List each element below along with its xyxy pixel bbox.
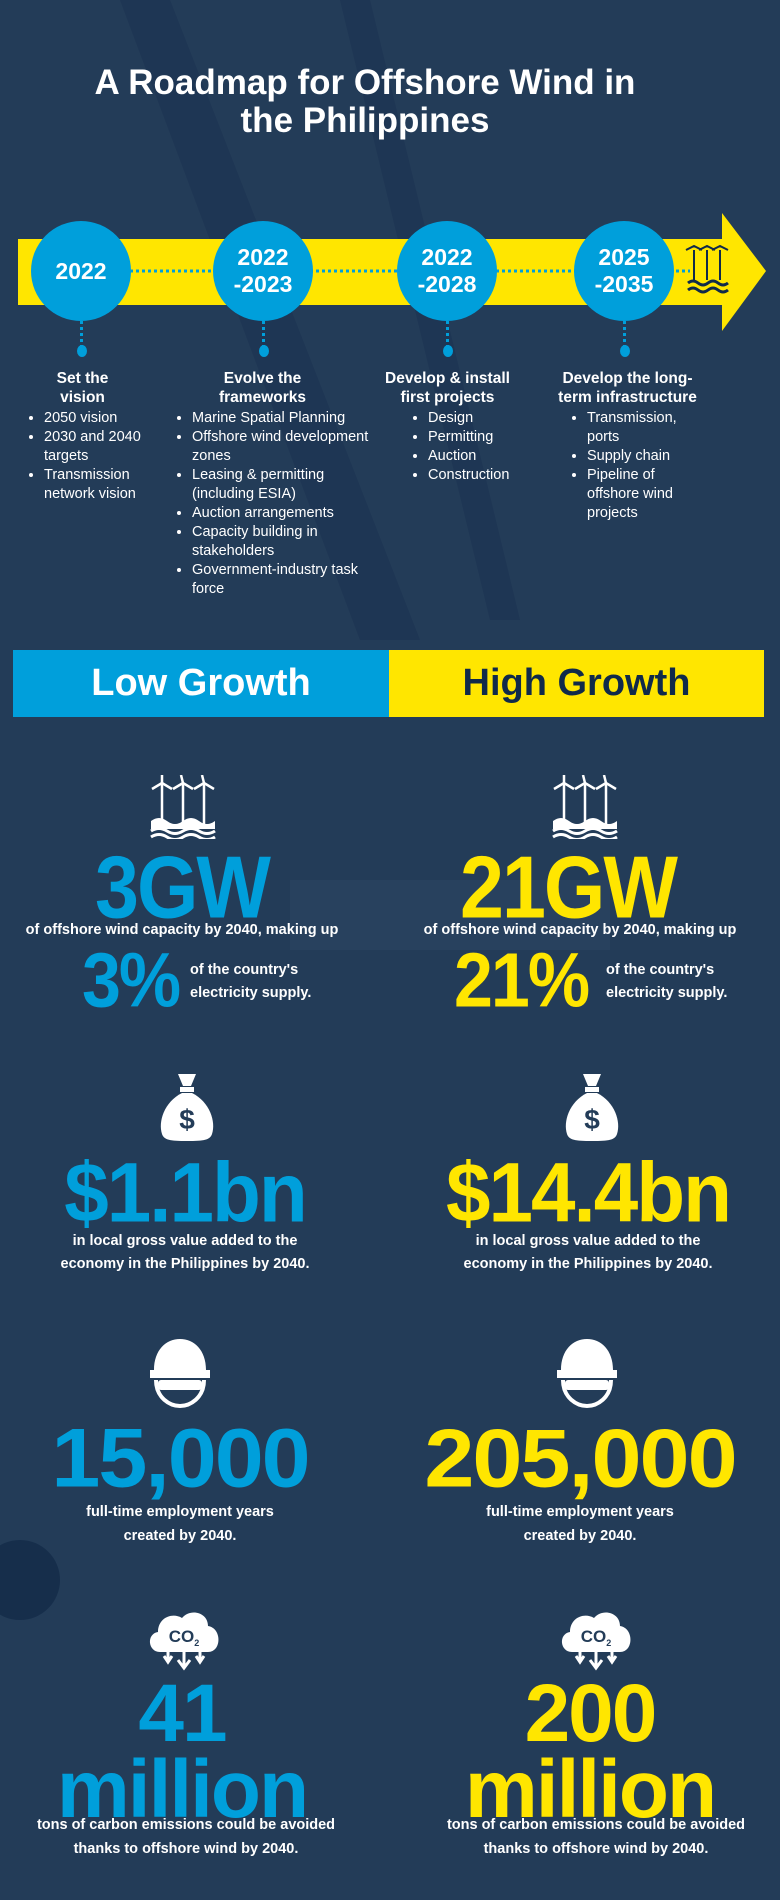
stage 1 text: Set the xyxy=(57,370,108,387)
text: capacity low: of offshore wind capacity by 2040, making up xyxy=(26,922,338,938)
stage 4 text: term infrastructure xyxy=(558,389,697,406)
header: low growth: Low Growth xyxy=(91,662,311,704)
milestone 2022-2023 xyxy=(213,221,313,321)
stat: $1.1bn: $1.1bn xyxy=(64,1146,306,1239)
stage 3 text: Design xyxy=(428,410,473,426)
text: jobs high: created by 2040. xyxy=(524,1528,636,1544)
milestone 2022 xyxy=(31,221,131,321)
text: carbon high xyxy=(447,1817,745,1857)
stat: 21GW: 21GW xyxy=(460,837,676,936)
icon: turbines right xyxy=(552,775,618,839)
milestone 2025-2035: 2025 xyxy=(598,244,650,270)
icon: CO2 cloud right: 2 xyxy=(606,1638,611,1648)
text: carbon high: tons of carbon emissions could be avoided xyxy=(447,1817,745,1833)
stat: 200 million: 200 xyxy=(525,1668,655,1759)
text: GVA low: in local gross value added to the xyxy=(73,1233,297,1249)
title: the Philippines xyxy=(241,101,489,140)
stage 2 text: Marine Spatial Planning xyxy=(192,410,345,426)
stage 2 text: Leasing & permitting (including ESIA) xyxy=(192,467,324,502)
stage 3 text: first projects xyxy=(401,389,494,406)
stage 3 text: Permitting xyxy=(428,429,493,445)
stat: 41 million: 41 xyxy=(138,1668,226,1759)
stage 3 text: Construction xyxy=(428,467,509,483)
stage 2 text: Offshore wind development zones xyxy=(192,429,368,464)
stage 3 text: Auction xyxy=(428,448,476,464)
stage 4 text: Supply chain xyxy=(587,448,670,464)
stat: 3% xyxy=(82,937,311,1023)
icon: CO2 cloud right xyxy=(562,1612,630,1670)
stage 2 text: Auction arrangements xyxy=(192,505,334,521)
text: jobs low: created by 2040. xyxy=(124,1528,236,1544)
text: jobs high: full-time employment years xyxy=(486,1504,674,1520)
stat: 3%: 3% xyxy=(82,937,179,1023)
stage 1 text: 2030 and 2040 targets xyxy=(44,429,141,464)
stage 1 text: 2050 vision xyxy=(44,410,117,426)
header: high growth xyxy=(389,650,764,717)
milestone 2022-2023: 2022 xyxy=(237,244,289,270)
stage 3 text: Develop & install xyxy=(385,370,510,387)
icon: money bag left xyxy=(160,1074,214,1141)
icon: CO2 cloud left: CO xyxy=(169,1627,194,1646)
milestone 2022-2023: -2023 xyxy=(234,271,292,297)
text: carbon low: thanks to offshore wind by 2040. xyxy=(74,1841,298,1857)
stat: 41 million: million xyxy=(57,1744,307,1835)
stage 2 text: Government-industry task force xyxy=(192,562,358,597)
stat: 200 million: million xyxy=(465,1744,715,1835)
icon: CO2 cloud right: CO xyxy=(581,1627,606,1646)
header: high growth: High Growth xyxy=(463,662,690,704)
icon: money bag left: $ xyxy=(179,1104,195,1135)
stage 4 text: Develop the long- xyxy=(562,370,693,387)
stage 2 text xyxy=(177,370,368,597)
stat: 15,000: 15,000 xyxy=(51,1410,309,1505)
stat: 3GW: 3GW xyxy=(95,837,269,936)
stage 2 text: Evolve the xyxy=(224,370,301,387)
milestone 2022-2028 xyxy=(397,221,497,321)
text: jobs low xyxy=(86,1504,274,1544)
icon: money bag right: $ xyxy=(584,1104,600,1135)
stat: 3%: of the country's electricity supply. xyxy=(190,962,311,1001)
stage 1 text: vision xyxy=(60,389,105,406)
header: low growth xyxy=(13,650,389,717)
icon: turbines left xyxy=(150,775,216,839)
text: GVA high xyxy=(464,1233,712,1272)
stat: 21%: of the country's electricity supply. xyxy=(606,962,727,1001)
stage 4 text: Pipeline of offshore wind projects xyxy=(587,467,673,521)
title: A Roadmap for Offshore Wind in xyxy=(95,63,635,102)
text: carbon high: thanks to offshore wind by 2040. xyxy=(484,1841,708,1857)
stage 1 text xyxy=(29,370,141,502)
title xyxy=(95,63,635,140)
milestone 2025-2035: -2035 xyxy=(595,271,653,297)
stat: 21% xyxy=(454,937,727,1023)
stat: 21%: 21% xyxy=(454,937,588,1023)
icon: CO2 cloud left xyxy=(150,1612,218,1670)
stage 2 text: frameworks xyxy=(219,389,306,406)
milestone 2022: 2022 xyxy=(55,258,107,284)
stage 4 text xyxy=(558,370,697,521)
text: carbon low: tons of carbon emissions could be avoided xyxy=(37,1817,335,1833)
milestone 2022-2028: 2022 xyxy=(421,244,473,270)
milestone 2022-2028: -2028 xyxy=(418,271,476,297)
text: GVA high: economy in the Philippines by 2040. xyxy=(464,1256,712,1272)
text: capacity high: of offshore wind capacity by 2040, making up xyxy=(424,922,736,938)
stat: 200 million xyxy=(465,1668,715,1835)
text: GVA low xyxy=(60,1233,310,1272)
stage 2 text: Capacity building in stakeholders xyxy=(192,524,318,559)
timeline arrow xyxy=(18,213,766,331)
text: GVA low: economy in the Philippines by 2040. xyxy=(60,1256,310,1272)
icon: CO2 cloud left: 2 xyxy=(194,1638,199,1648)
stat: 41 million xyxy=(57,1668,307,1835)
text: jobs low: full-time employment years xyxy=(86,1504,274,1520)
milestone 2025-2035 xyxy=(574,221,674,321)
text: GVA high: in local gross value added to the xyxy=(476,1233,700,1249)
text: carbon low xyxy=(37,1817,335,1857)
text: jobs high xyxy=(486,1504,674,1544)
stage 3 text xyxy=(385,370,510,483)
stat: $14.4bn: $14.4bn xyxy=(446,1146,730,1239)
icon: money bag right xyxy=(566,1074,618,1141)
icon: helmet left xyxy=(150,1339,210,1408)
stat: 205,000: 205,000 xyxy=(424,1413,736,1505)
stage 4 text: Transmission, ports xyxy=(587,410,677,445)
stage 1 text: Transmission network vision xyxy=(44,467,136,502)
icon: helmet right xyxy=(557,1339,617,1408)
